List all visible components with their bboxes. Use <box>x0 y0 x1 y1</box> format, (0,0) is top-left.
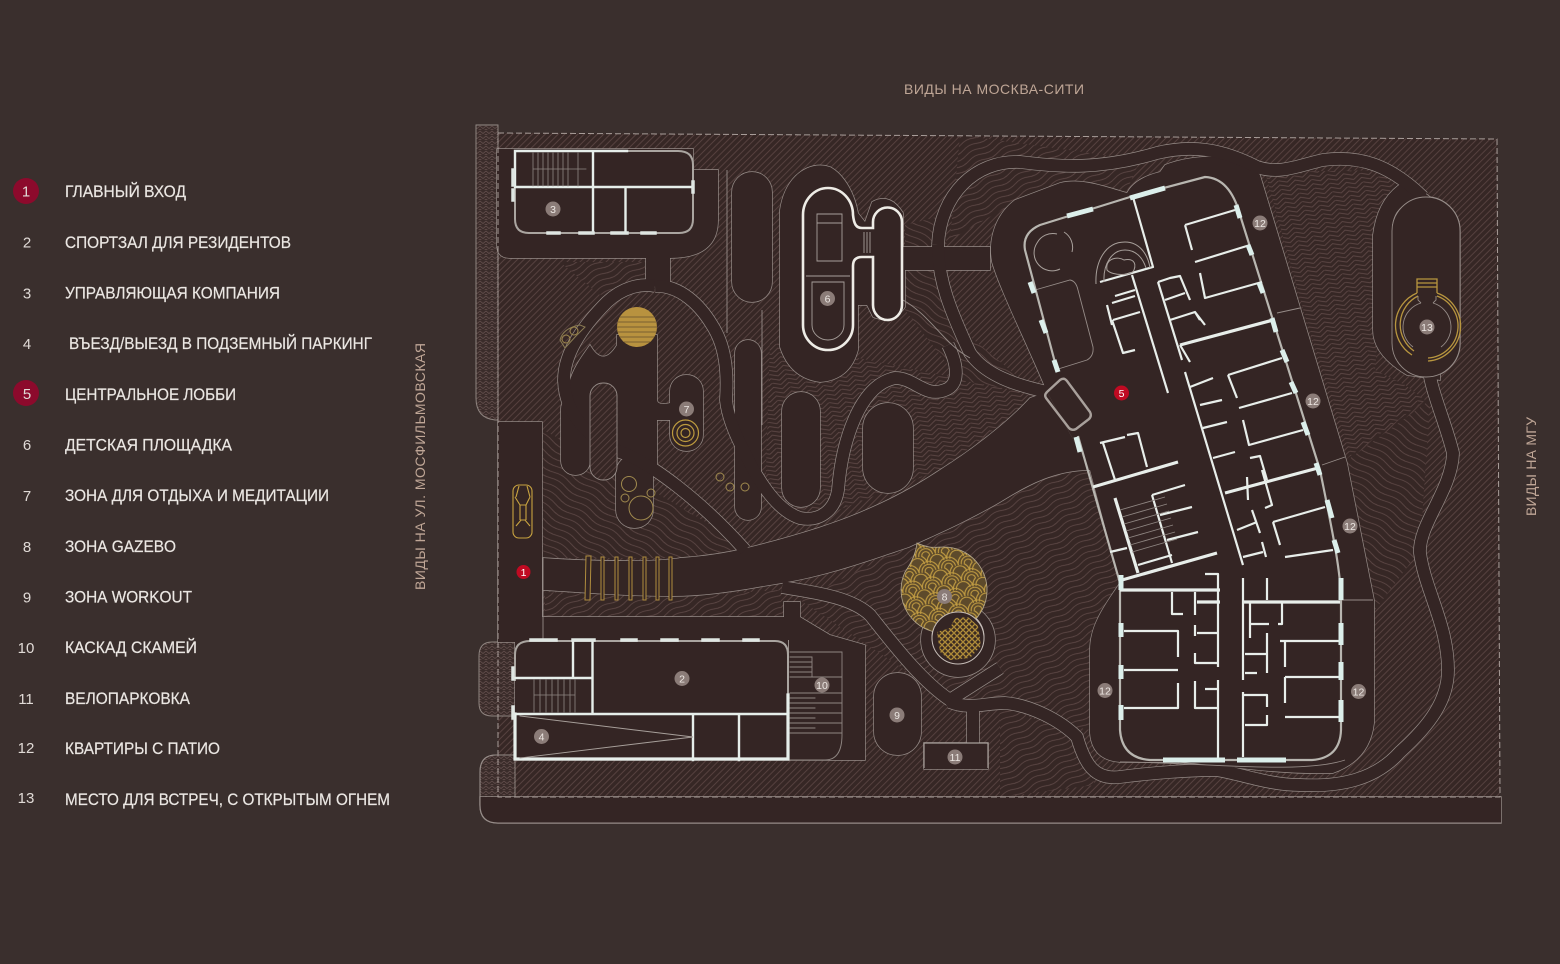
legend <box>13 178 390 809</box>
marker 6 <box>820 291 835 306</box>
marker 13: 13 <box>1421 322 1433 334</box>
legend item 10: benches: КАСКАД СКАМЕЙ <box>65 638 197 657</box>
marker 12 middle <box>1306 394 1320 408</box>
site plan <box>476 125 1501 823</box>
building 2 and 4: gym and parking ramp <box>513 640 842 760</box>
glazing segments <box>1030 188 1341 760</box>
building 3: management company <box>513 151 693 233</box>
legend item 8: gazebo: ЗОНА GAZEBO <box>65 538 176 556</box>
marker 13 <box>1420 320 1434 334</box>
left paved crosshatch strip <box>476 125 498 420</box>
legend item 12: patio apartments: КВАРТИРЫ С ПАТИО <box>65 740 220 758</box>
marker 12 east <box>1342 518 1358 534</box>
legend item 3: management company: 3 <box>23 286 31 302</box>
legend item 13: fire meeting place: 13 <box>18 790 34 807</box>
fire place ring <box>1396 279 1461 361</box>
legend item 8: gazebo: 8 <box>23 539 31 556</box>
bench rows at entrance <box>585 556 672 600</box>
gazebo scales <box>901 543 987 664</box>
legend item 7: meditation zone: ЗОНА ДЛЯ ОТДЫХА И МЕДИТАЦИИ <box>65 487 329 505</box>
legend item 6: playground: ДЕТСКАЯ ПЛОЩАДКА <box>65 436 232 454</box>
legend item 9: workout: 9 <box>23 590 31 606</box>
marker 12 north <box>1252 216 1268 230</box>
legend item 7: meditation zone: 7 <box>23 488 31 505</box>
marker 2 <box>674 671 690 686</box>
legend item 4: parking entrance: ВЪЕЗД/ВЫЕЗД В ПОДЗЕМНЫЙ ПАРКИНГ <box>69 334 372 353</box>
stairwell <box>1120 497 1177 552</box>
legend item 1: main entrance <box>13 178 186 204</box>
main residential building walls <box>1025 177 1341 760</box>
legend item 1: main entrance: 1 <box>22 184 30 200</box>
legend item 1: main entrance: ГЛАВНЫЙ ВХОД <box>65 182 186 201</box>
legend item 4: parking entrance: 4 <box>23 336 31 353</box>
gold disc <box>617 307 657 347</box>
legend item 5: central lobby: 5 <box>23 386 31 403</box>
marker 4 <box>534 729 549 744</box>
legend item 10: benches: 10 <box>18 640 34 657</box>
marker 1 <box>516 565 530 579</box>
legend item 9: workout: ЗОНА WORKOUT <box>65 588 192 606</box>
marker 4: 4 <box>539 732 545 744</box>
site boundary dashed <box>498 133 1500 797</box>
marker 8: 8 <box>942 592 948 604</box>
marker 12 south-east: 12 <box>1353 686 1364 698</box>
outer facade <box>1025 177 1341 760</box>
legend item 6: playground: 6 <box>23 437 31 454</box>
marker 7 <box>679 402 694 416</box>
marker 3 <box>546 202 560 216</box>
legend item 5: central lobby <box>13 380 236 406</box>
marker 12 north: 12 <box>1254 218 1266 230</box>
legend item 11: bicycle parking: ВЕЛОПАРКОВКА <box>65 690 190 708</box>
marker 9 <box>890 708 904 722</box>
thick walls <box>1093 320 1340 602</box>
marker 5 <box>1114 386 1129 400</box>
legend item 2: gym: 2 <box>23 234 31 252</box>
marker 6: 6 <box>825 294 831 306</box>
legend item 12: patio apartments: 12 <box>18 740 34 757</box>
marker 10 <box>814 678 830 692</box>
view label: Mosfilmovskaya street: ВИДЫ НА УЛ. МОСФИЛЬМОВСКАЯ <box>412 343 428 590</box>
small circles <box>560 325 749 520</box>
legend item 11: bicycle parking: 11 <box>18 691 34 708</box>
legend item 3: management company: УПРАВЛЯЮЩАЯ КОМПАНИЯ <box>65 284 280 302</box>
building 6: playground outline <box>803 188 902 350</box>
marker 3: 3 <box>550 204 556 216</box>
landscape hatch ground <box>498 133 1500 797</box>
meditation target <box>672 420 698 446</box>
view label: MSU: ВИДЫ НА МГУ <box>1523 417 1539 516</box>
marker 12 south-east <box>1351 684 1366 699</box>
paved patches at gym <box>479 642 515 797</box>
marker 9: 9 <box>894 710 900 722</box>
marker 12 middle: 12 <box>1307 396 1319 408</box>
gold elements <box>513 279 1461 664</box>
marker 11: 11 <box>950 752 961 764</box>
bottom road line <box>480 755 1501 823</box>
hatched island capsule <box>590 383 617 480</box>
marker 12 east: 12 <box>1344 521 1356 533</box>
marker 12 south-west <box>1098 683 1112 698</box>
marker 2: 2 <box>679 674 685 686</box>
legend item 2: gym: СПОРТЗАЛ ДЛЯ РЕЗИДЕНТОВ <box>65 234 291 252</box>
view label: Moscow City: ВИДЫ НА МОСКВА-СИТИ <box>904 81 1084 97</box>
legend item 13: fire meeting place: МЕСТО ДЛЯ ВСТРЕЧ, С ОТКРЫТЫМ ОГНЕМ <box>65 791 390 809</box>
marker 10: 10 <box>816 680 828 692</box>
marker 8 <box>937 589 952 604</box>
plan markers <box>516 202 1434 764</box>
legend item 8: gazebo <box>23 538 176 556</box>
legend item 11: bicycle parking <box>18 690 190 708</box>
marker 11 <box>948 750 962 764</box>
legend item 10: benches <box>18 638 197 657</box>
bike parking outline <box>924 743 988 768</box>
marker 1: 1 <box>521 567 527 579</box>
paths and paved areas <box>480 149 1501 823</box>
lobby vestibule <box>1045 379 1091 430</box>
interior walls <box>1100 197 1340 758</box>
car <box>513 485 532 538</box>
marker 5: 5 <box>1119 388 1125 400</box>
legend item 5: central lobby: ЦЕНТРАЛЬНОЕ ЛОББИ <box>65 386 236 404</box>
thin landscape lines <box>476 125 1460 767</box>
marker 7: 7 <box>684 404 690 416</box>
round lobby features <box>1034 232 1150 284</box>
marker 12 south-west: 12 <box>1099 686 1111 698</box>
